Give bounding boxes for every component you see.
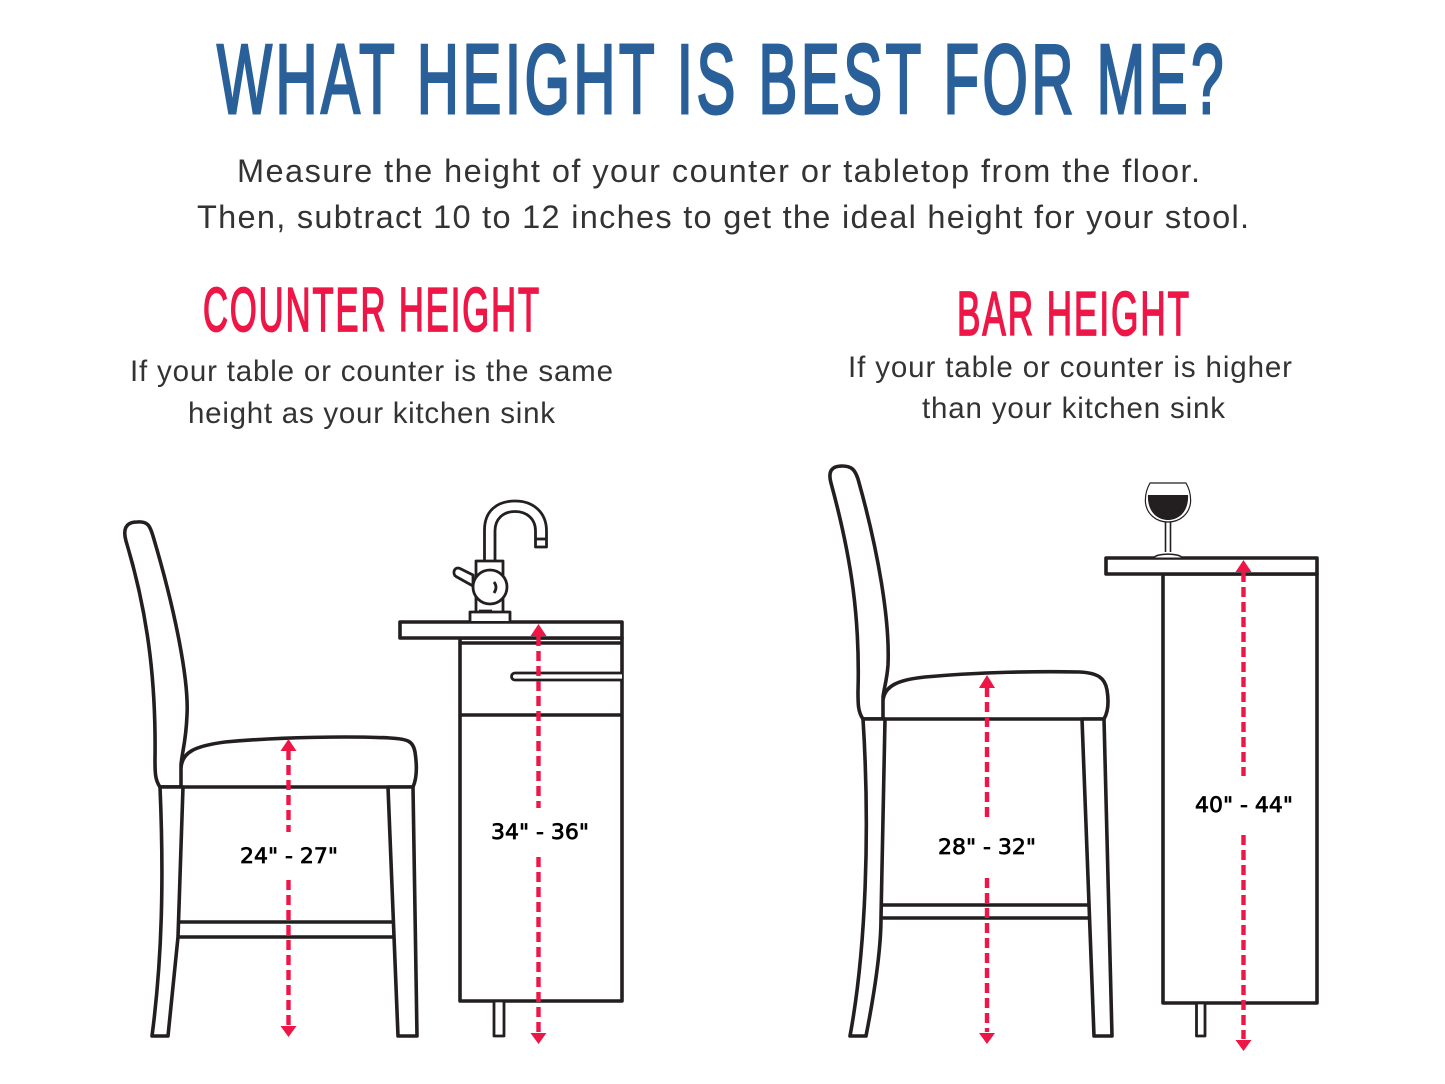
bar stool: [830, 466, 1112, 1036]
intro text: [197, 153, 1249, 235]
bar cabinet with wine glass: [1106, 483, 1317, 1036]
counter height description: height as your kitchen sink: [188, 397, 555, 430]
counter cabinet with faucet: [400, 501, 622, 1036]
arrow: stool height 24-27: [280, 739, 296, 1037]
label: 34-36: 34" - 36": [491, 820, 589, 844]
intro text: Measure the height of your counter or tabletop from the floor.: [237, 153, 1200, 189]
heading: bar height: BAR HEIGHT: [957, 280, 1191, 349]
label: 40-44: 40" - 44": [1195, 793, 1293, 817]
icon: faucet: [454, 501, 546, 621]
counter stool: [125, 522, 417, 1036]
arrow: counter height 34-36: [530, 624, 546, 1044]
icon: wine glass: [1145, 483, 1191, 558]
bar height description: If your table or counter is higher: [848, 351, 1292, 384]
bar height description: than your kitchen sink: [922, 392, 1225, 425]
arrow: bar height 40-44: [1236, 560, 1252, 1051]
counter height description: [130, 355, 613, 430]
heading: counter height: COUNTER HEIGHT: [203, 276, 541, 345]
arrow: stool height 28-32: [979, 675, 995, 1044]
label: 24-27: 24" - 27": [240, 844, 338, 868]
panel: counter height: [125, 276, 622, 1044]
counter height description: If your table or counter is the same: [130, 355, 613, 388]
intro text: Then, subtract 10 to 12 inches to get the ideal height for your stool.: [197, 199, 1249, 235]
panel: bar height: [830, 280, 1317, 1051]
label: 28-32: 28" - 32": [938, 835, 1036, 859]
bar height description: [848, 351, 1292, 425]
